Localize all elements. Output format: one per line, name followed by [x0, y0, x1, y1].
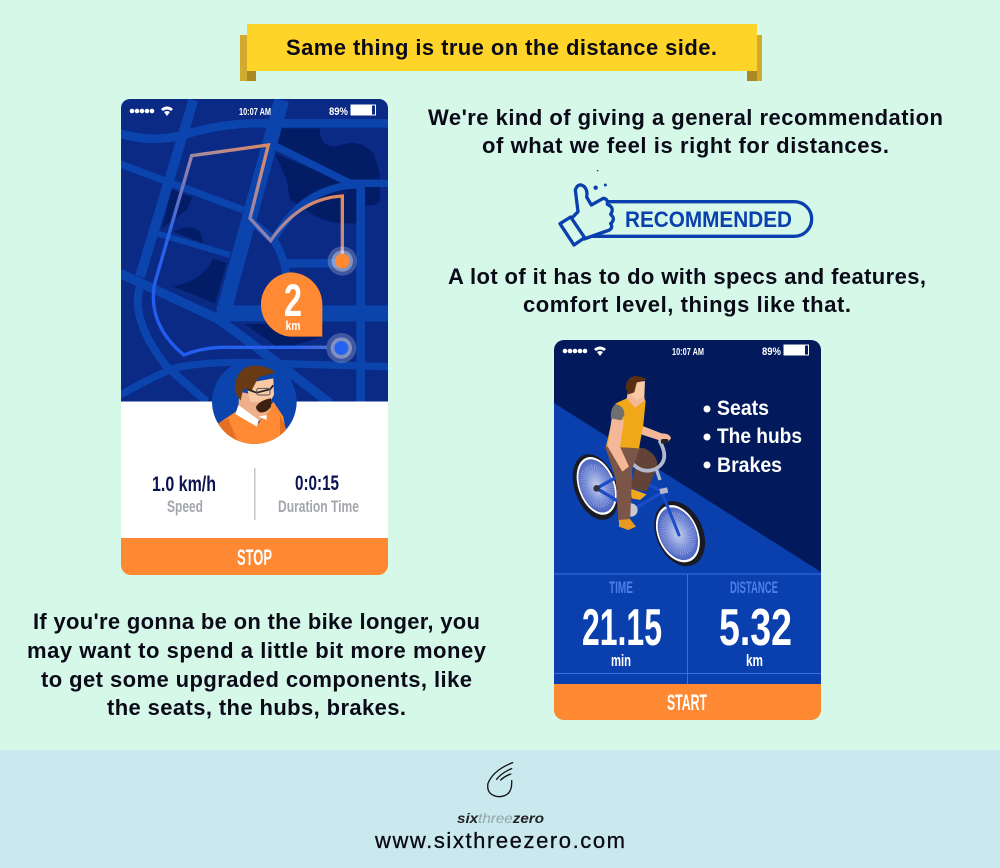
stats grid lines: [554, 574, 821, 684]
handlebar: [632, 442, 664, 471]
button: stop: [121, 538, 388, 575]
text block: specs and features: A lot of it has to do with specs and features,: [448, 264, 926, 289]
map area: [120, 99, 390, 403]
stat: speed: Speed: [167, 497, 203, 516]
text block: upgraded components: [27, 609, 487, 720]
stat: speed: [152, 473, 216, 516]
button: stop: STOP: [237, 545, 272, 570]
status bar: [563, 345, 808, 358]
blue diagonal: [554, 403, 821, 684]
torso: [606, 398, 646, 448]
status bar: [130, 105, 376, 118]
banner: title ribbon: Same thing is true on the distance side.: [286, 35, 717, 60]
icon: recommended badge with thumbs up: RECOMMENDED: [625, 207, 792, 232]
banner: title ribbon: [240, 24, 762, 81]
list: components: The hubs: [717, 425, 802, 448]
back arm: [638, 425, 671, 443]
stat: time: min: [611, 651, 631, 670]
stat: duration time: Duration Time: [278, 497, 359, 516]
stat: distance: [719, 578, 792, 670]
illustration: cyclist on bike: [564, 376, 715, 574]
stat: speed: 1.0 km/h: [152, 473, 216, 496]
distance value: 2: [284, 275, 302, 326]
marker: start point blue: [326, 333, 356, 363]
brand name: sixthree zero: [457, 811, 544, 826]
stat: time: TIME: [609, 578, 633, 597]
status bar: 89%: [762, 346, 781, 358]
icon: winged logo: [488, 763, 513, 797]
stat: duration time: [278, 472, 359, 516]
text block: general recommendation: We're kind of giving a general recommendation: [428, 105, 943, 130]
leg far: [627, 447, 657, 492]
text block: upgraded components: If you're gonna be on the bike longer, you: [33, 609, 480, 634]
text block: upgraded components: to get some upgraded components, like: [41, 667, 472, 692]
text block: general recommendation: of what we feel is right for distances.: [482, 133, 889, 158]
panel: right phone with cyclist: [554, 340, 821, 720]
bike frame: [597, 473, 679, 535]
icon: recommended badge with thumbs up: [560, 170, 812, 245]
footer band: [0, 750, 1000, 868]
distance value: km: [286, 318, 300, 333]
status bar: 10:07 AM: [239, 106, 271, 118]
head: [628, 381, 645, 400]
status bar: 10:07 AM: [672, 346, 704, 358]
button: start: START: [667, 690, 707, 715]
arm: [608, 418, 629, 472]
roads: [120, 100, 390, 403]
neck: [627, 390, 645, 408]
stat: distance: DISTANCE: [730, 578, 778, 597]
stat: distance: km: [746, 651, 763, 670]
front wheel: [645, 493, 715, 574]
rear wheel: [564, 448, 627, 526]
list: components: [704, 397, 802, 477]
dark city blocks: [162, 128, 380, 347]
text block: upgraded components: the seats, the hubs, brakes.: [107, 695, 406, 720]
list: components: Seats: [717, 397, 769, 420]
status bar: 89%: [329, 106, 348, 118]
marker: end point orange: [328, 246, 357, 276]
stat: time: 21.15: [582, 599, 662, 657]
avatar: man with glasses: [212, 366, 297, 444]
website url: www.sixthreezero.com: [374, 828, 625, 853]
stat: duration time: 0:0:15: [295, 472, 339, 495]
text block: upgraded components: may want to spend a little bit more money: [27, 638, 487, 663]
text block: specs and features: comfort level, things like that.: [523, 292, 851, 317]
text block: specs and features: [448, 264, 926, 317]
leg near: [605, 447, 640, 522]
panel: left phone with map: [120, 99, 390, 575]
stat: time: [582, 578, 662, 670]
distance value: [284, 275, 302, 333]
route line: [153, 145, 342, 355]
distance pin: [261, 272, 322, 337]
stat: distance: 5.32: [719, 599, 792, 657]
divider: [254, 468, 256, 520]
text block: general recommendation: [428, 105, 943, 158]
button: start: [554, 684, 821, 720]
list: components: Brakes: [717, 454, 782, 477]
